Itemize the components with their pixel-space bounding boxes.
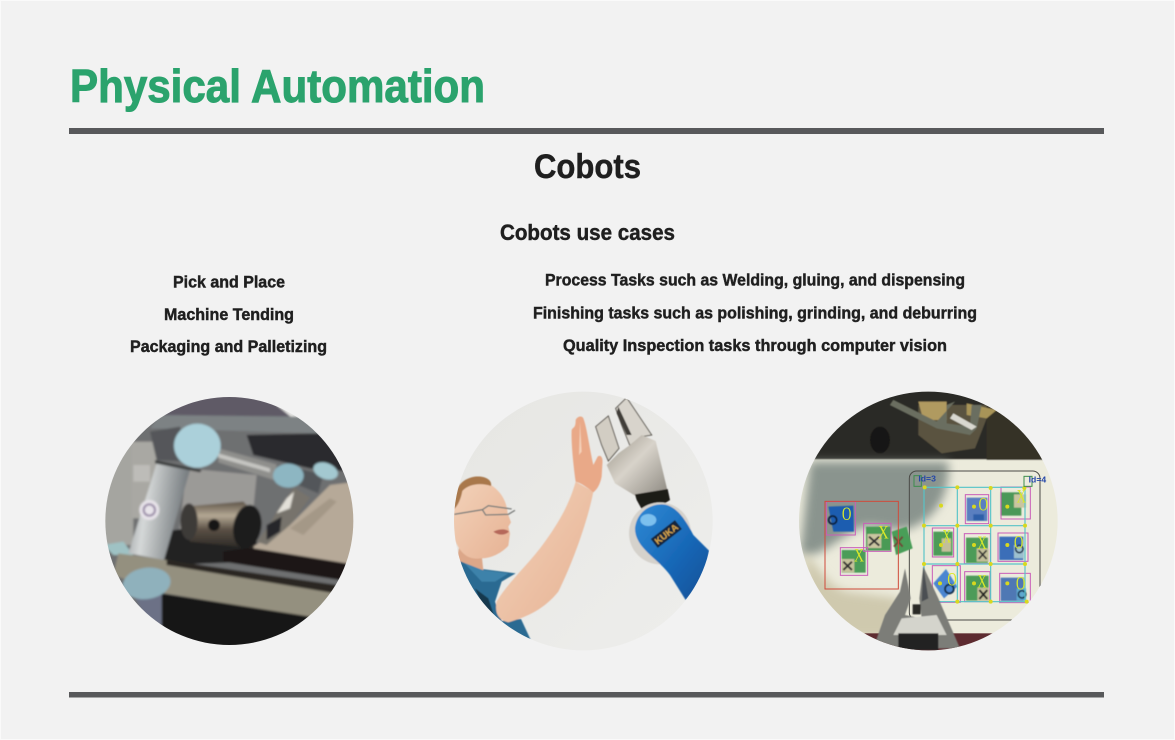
heading: Cobots: Cobots	[534, 148, 641, 186]
detected labels: X	[977, 533, 987, 554]
cyan grid	[924, 487, 1025, 602]
board outline	[909, 471, 1040, 620]
photo background	[452, 390, 715, 653]
marker ids	[914, 474, 1046, 486]
shadow on table	[800, 462, 949, 555]
detected labels: X	[942, 526, 951, 547]
text block: left use cases: Machine Tending	[164, 305, 294, 324]
photo circle: man high-fiving robot hand	[452, 390, 715, 653]
photo circle: cobot arm tending machine	[103, 395, 357, 648]
detected labels	[842, 486, 1026, 595]
detected labels: O	[842, 504, 851, 525]
man	[452, 417, 603, 643]
red work area	[825, 501, 898, 589]
detection boxes	[826, 487, 1030, 603]
subheading: Cobots use cases: Cobots use cases	[500, 220, 675, 245]
detected labels: X	[977, 571, 987, 592]
text block: left use cases	[130, 272, 327, 356]
table and shadows	[799, 392, 1058, 634]
robot gripper	[873, 567, 960, 650]
detected labels: O	[947, 570, 957, 591]
marker ids: Id=4	[1029, 474, 1046, 484]
robot hand and KUKA arm: KUKA	[653, 522, 680, 546]
text block: left use cases: Packaging and Palletizing	[130, 337, 327, 356]
text block: right use cases: Quality Inspection tasks through computer vision	[563, 336, 947, 355]
detected labels: X	[854, 546, 864, 567]
blocks	[828, 492, 1026, 601]
photo circle: computer vision inspection of blocks	[797, 390, 1063, 657]
yellow grid points	[921, 485, 1029, 604]
bottom rule	[69, 692, 1104, 698]
text block: right use cases: Finishing tasks such as polishing, grinding, and deburring	[533, 304, 977, 322]
detected labels: X	[1017, 486, 1026, 507]
detected labels: O	[1016, 574, 1025, 595]
text block: right use cases: Process Tasks such as Welding, gluing, and dispensing	[545, 270, 965, 290]
marker ids: Id=3	[918, 474, 936, 484]
text block: right use cases	[533, 270, 977, 355]
detected labels: X	[878, 522, 889, 543]
top rule	[69, 128, 1104, 134]
detected labels: O	[979, 495, 988, 516]
title: Physical Automation	[70, 60, 485, 112]
robot hand and KUKA arm	[596, 398, 709, 600]
text block: left use cases: Pick and Place	[173, 272, 285, 292]
detected labels: O	[1014, 532, 1023, 553]
